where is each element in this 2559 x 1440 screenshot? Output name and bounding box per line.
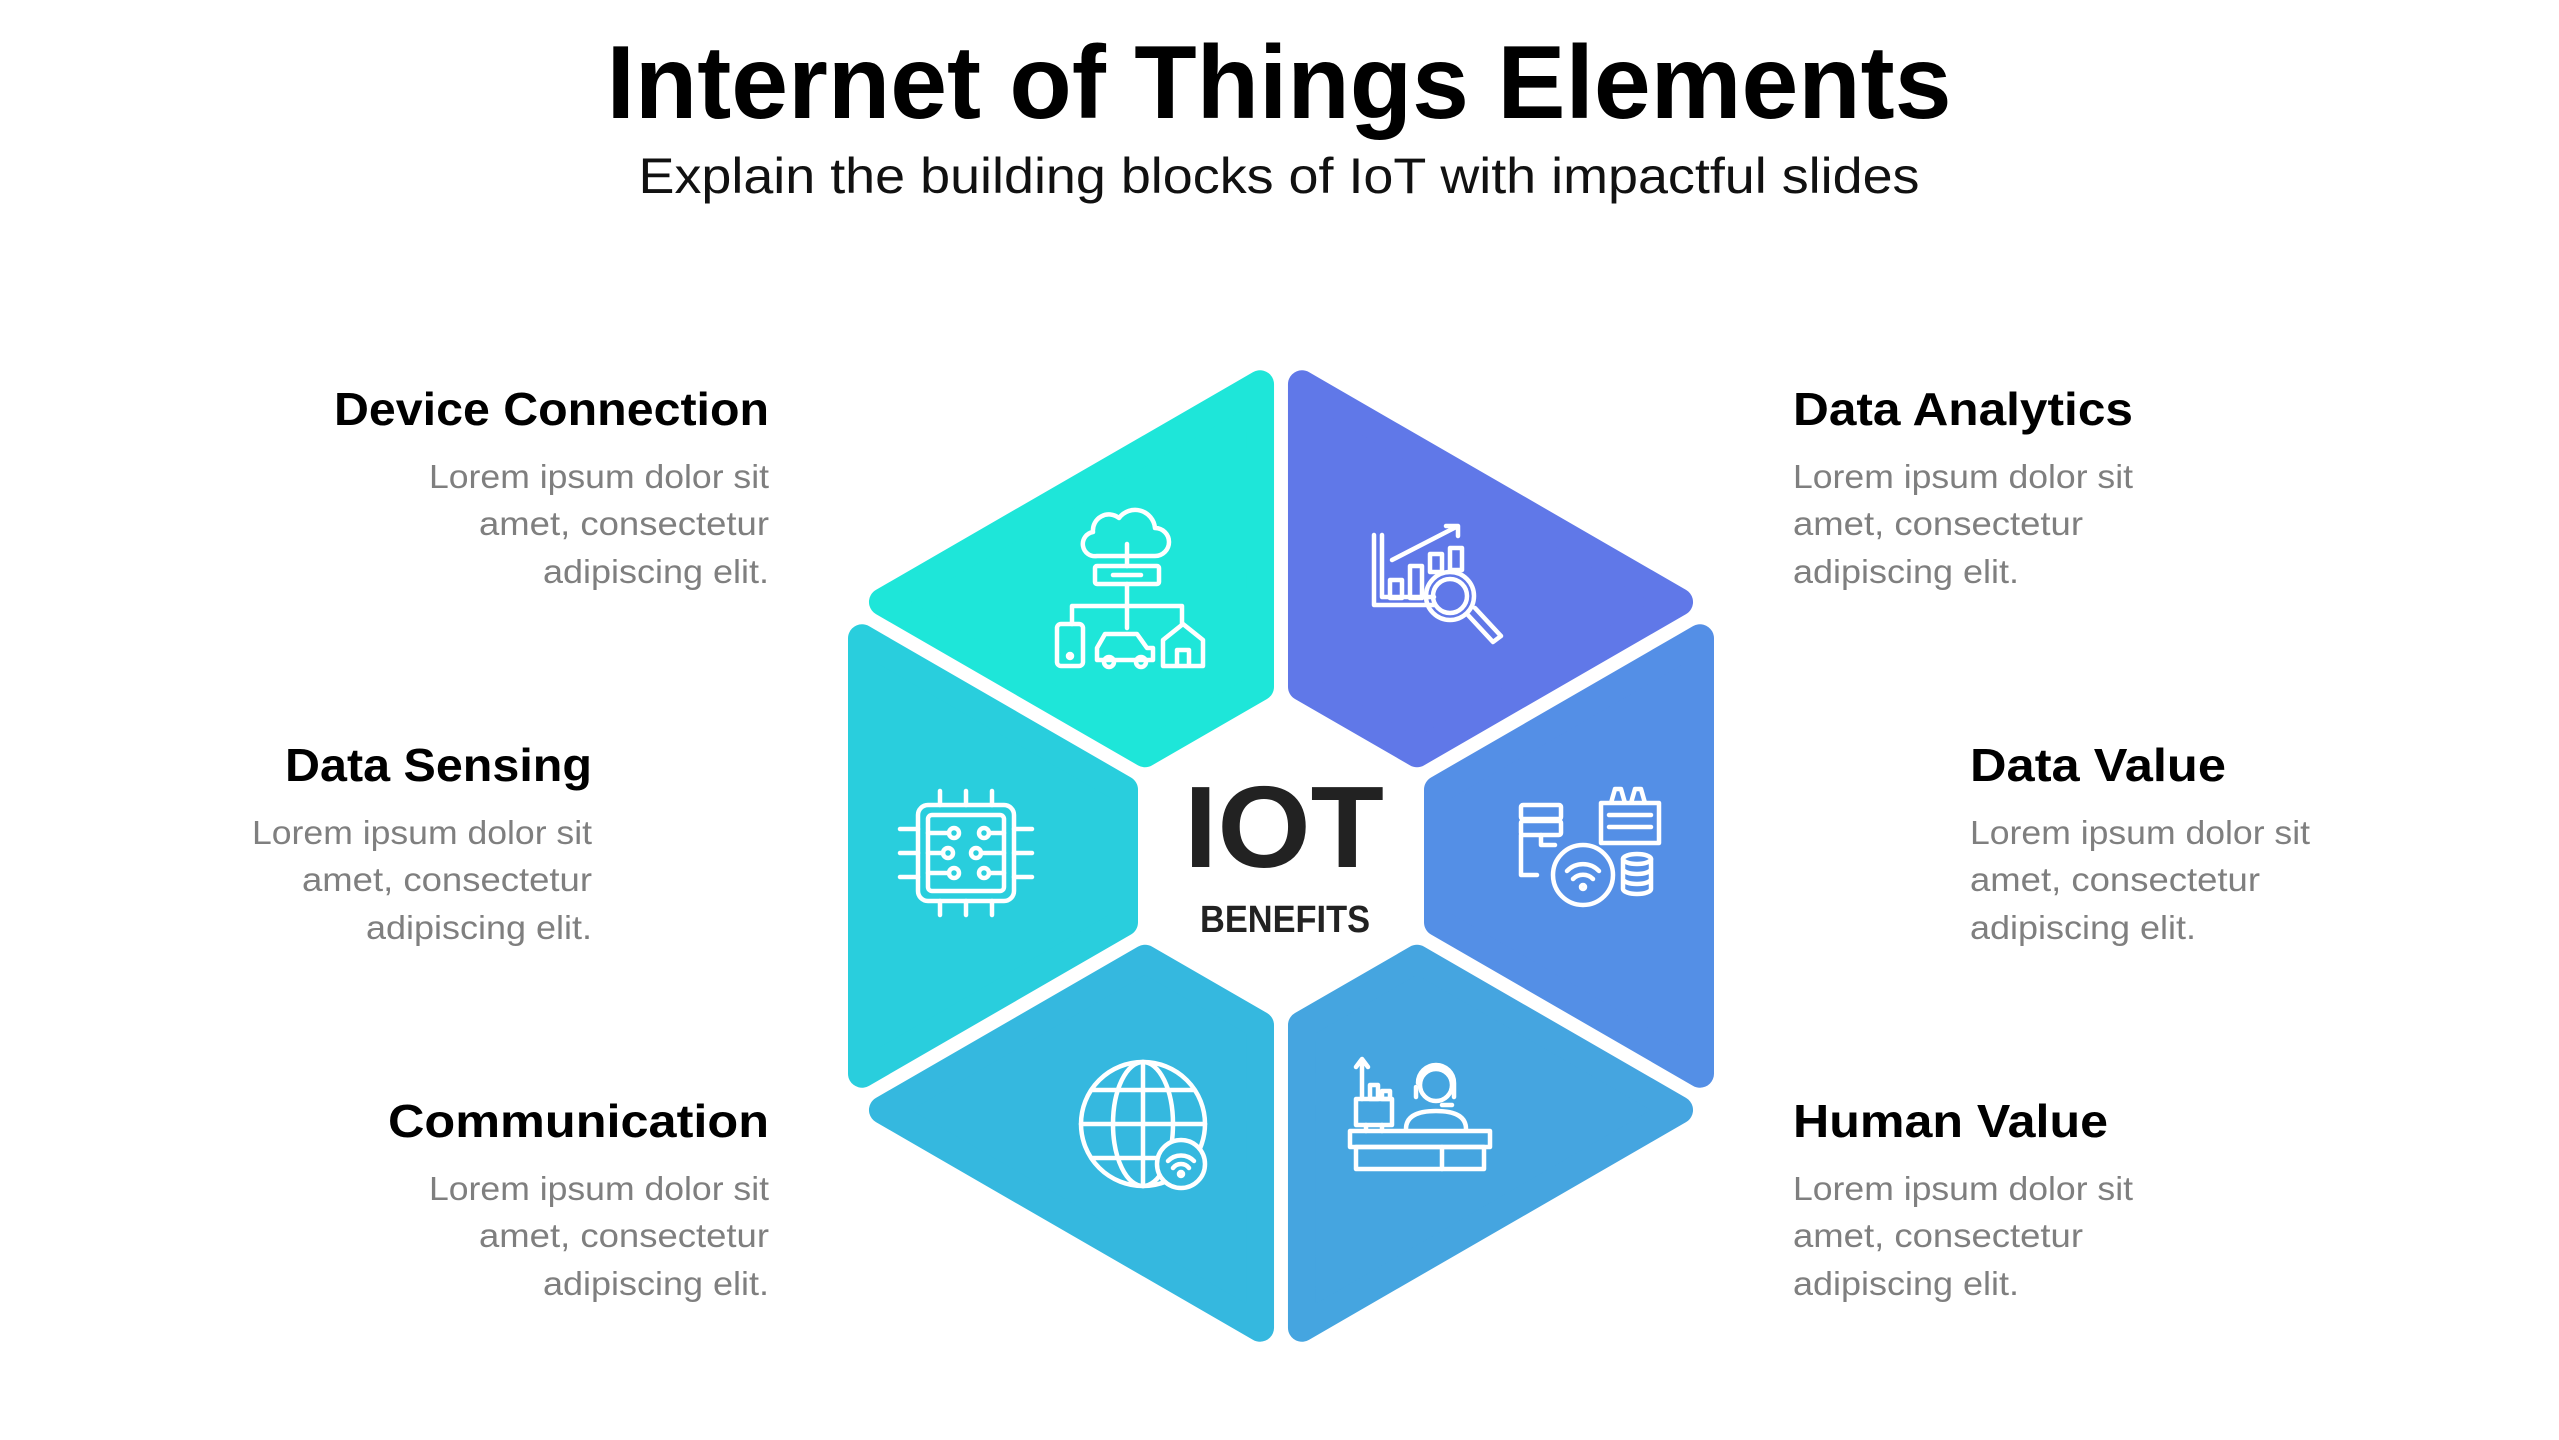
center label: IOT <box>1184 762 1384 892</box>
icon: network devices <box>1057 510 1203 667</box>
icon: human value <box>1350 1059 1490 1169</box>
text block: Device Connection: amet, consectetur <box>479 505 769 542</box>
text block: Data Value: Data Value <box>1970 739 2226 791</box>
icon: analytics <box>1374 526 1501 642</box>
text block: Data Sensing: Data Sensing <box>285 739 592 791</box>
segment: device connection <box>883 384 1391 829</box>
center label: BENEFITS <box>1200 899 1370 941</box>
text block: Device Connection: Lorem ipsum dolor sit <box>429 458 769 495</box>
text block: Communication: Lorem ipsum dolor sit <box>429 1170 769 1207</box>
segment: human value <box>1171 883 1679 1328</box>
text block: Human Value: adipiscing elit. <box>1793 1265 2019 1302</box>
text block: Communication: Communication <box>388 1095 769 1147</box>
text block: Data Value <box>1970 739 2310 946</box>
text block: Data Analytics: adipiscing elit. <box>1793 553 2019 590</box>
text block: Data Analytics: Lorem ipsum dolor sit <box>1793 458 2133 495</box>
text block: Human Value: amet, consectetur <box>1793 1217 2083 1254</box>
segment: data value <box>1438 638 1700 1074</box>
text block: Human Value <box>1793 1095 2133 1302</box>
text block: Data Analytics: Data Analytics <box>1793 383 2133 435</box>
icon: data value <box>1521 789 1659 905</box>
text block: Device Connection: Device Connection <box>334 383 769 435</box>
text block: Communication: amet, consectetur <box>479 1217 769 1254</box>
text block: Communication <box>388 1095 769 1302</box>
text block: Data Sensing <box>252 739 592 946</box>
text block: Data Sensing: adipiscing elit. <box>366 909 592 946</box>
text block: Data Sensing: amet, consectetur <box>302 861 592 898</box>
text block: Data Analytics: amet, consectetur <box>1793 505 2083 542</box>
icon: globe wifi <box>1081 1062 1205 1188</box>
text block: Human Value: Lorem ipsum dolor sit <box>1793 1170 2133 1207</box>
text block: Device Connection: adipiscing elit. <box>543 553 769 590</box>
segment: data analytics <box>1171 384 1679 829</box>
title: Internet of Things Elements <box>606 25 1952 141</box>
text block: Data Sensing: Lorem ipsum dolor sit <box>252 814 592 851</box>
text block: Device Connection <box>334 383 769 590</box>
text block: Data Value: adipiscing elit. <box>1970 909 2196 946</box>
text block: Data Analytics <box>1793 383 2133 590</box>
text block: Human Value: Human Value <box>1793 1095 2108 1147</box>
text block: Data Value: Lorem ipsum dolor sit <box>1970 814 2310 851</box>
subtitle: Explain the building blocks of IoT with impactful slides <box>638 148 1920 204</box>
icon: chip <box>900 791 1032 915</box>
segment: data sensing <box>862 638 1124 1074</box>
text block: Communication: adipiscing elit. <box>543 1265 769 1302</box>
segment: communication <box>883 883 1391 1328</box>
hexagon diagram <box>862 384 1700 1328</box>
text block: Data Value: amet, consectetur <box>1970 861 2260 898</box>
